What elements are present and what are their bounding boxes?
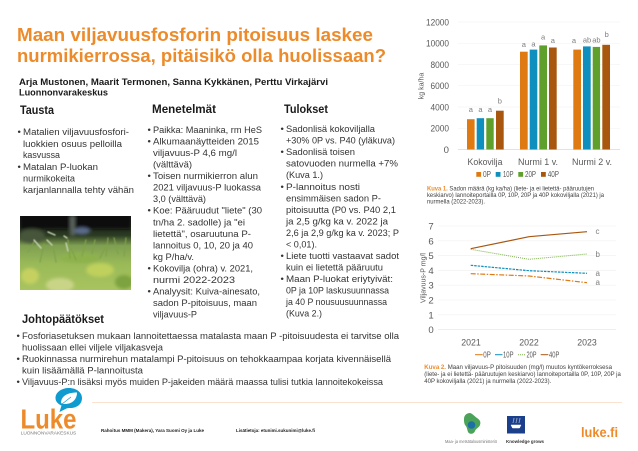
y axis labels: 3 bbox=[428, 281, 434, 292]
x axis labels: 2022 bbox=[519, 337, 539, 348]
y axis labels: 10000 bbox=[426, 39, 449, 50]
panel: Tulokset: (Kuva 1.) bbox=[286, 170, 323, 181]
panel: Tulokset: ja 40 P nousuusuunnassa bbox=[285, 297, 388, 308]
bar chart: sadon määrä bbox=[418, 18, 620, 179]
panel: Menetelmät: Alkumaanäytteiden 2015 bbox=[153, 136, 259, 148]
panel: Menetelmät: kg P/ha/v. bbox=[153, 252, 194, 263]
panel: Tulokset: Maan P-luokat eriytyivät: bbox=[286, 274, 393, 285]
y axis labels: 0 bbox=[428, 325, 434, 336]
significance letters: a bbox=[596, 278, 600, 287]
panel: Menetelmät: • bbox=[148, 206, 151, 216]
y axis labels: 6 bbox=[428, 236, 434, 247]
panel: Menetelmät: tn/ha 2. sadolle) ja "ei bbox=[153, 218, 245, 228]
authors: Luonnonvarakeskus bbox=[19, 86, 108, 98]
panel: Tausta: kasvussa bbox=[23, 150, 61, 161]
logo: Yara: Knowledge grows bbox=[506, 439, 544, 444]
legend bbox=[475, 350, 559, 360]
significance letters: a bbox=[572, 36, 577, 45]
line: 20P bbox=[471, 249, 587, 259]
logo: Yara bbox=[506, 416, 544, 444]
logo: Luke: Luke bbox=[20, 404, 76, 434]
legend: 40P bbox=[549, 350, 559, 360]
category labels: Nurmi 2 v. bbox=[572, 157, 612, 168]
panel: Menetelmät: Paikka: Maaninka, rm HeS bbox=[153, 125, 262, 136]
panel: Menetelmät: 2021 viljavuus-P luokassa bbox=[153, 182, 262, 194]
panel: Menetelmät: nurmi 2022-2023 bbox=[153, 275, 235, 286]
panel: Johtopäätökset: • bbox=[16, 377, 20, 388]
significance letters: a bbox=[551, 36, 556, 45]
panel: Tulokset bbox=[280, 104, 399, 320]
bars: 20P bbox=[486, 45, 600, 150]
panel: Menetelmät: Toisen nurmikierron alun bbox=[153, 171, 258, 182]
line: 0P bbox=[471, 274, 587, 283]
panel: Menetelmät: • bbox=[148, 171, 151, 182]
bars: 10P bbox=[477, 46, 591, 150]
authors bbox=[19, 76, 328, 98]
panel: Tausta: nurmikokeita bbox=[23, 174, 76, 184]
panel: Menetelmät: Kokovilja (ohra) v. 2021, bbox=[153, 264, 253, 274]
logo: ministry: Maa- ja metsätalousministeriö bbox=[445, 439, 498, 444]
significance letters: b bbox=[498, 96, 502, 106]
category labels: Nurmi 1 v. bbox=[518, 157, 558, 168]
panel: Tulokset: • bbox=[280, 274, 284, 285]
y axis labels: 4 bbox=[428, 266, 434, 277]
panel: Menetelmät: • bbox=[148, 136, 151, 148]
line chart: viljavuus-P bbox=[420, 222, 616, 360]
panel: Menetelmät: (välttävä) bbox=[153, 160, 192, 170]
caption: Kuva 1: keskiarvo) lannoiteportailla 0P, 10P, 20P ja 40P kokoviljalla (2021) ja bbox=[427, 192, 605, 199]
category labels: Kokovilja bbox=[468, 157, 503, 168]
panel: Tulokset: 2,6 ja 2,9 g/kg ka v. 2023; P bbox=[286, 228, 399, 239]
y axis title: Viljavuus-P mg/l bbox=[420, 253, 428, 303]
panel: Tausta: • bbox=[18, 162, 21, 173]
panel: Johtopäätökset: • bbox=[16, 331, 20, 342]
panel: Menetelmät: • bbox=[148, 264, 151, 274]
line: 10P bbox=[471, 265, 587, 273]
panel: Tulokset: ja 2,5 g/kg ka v. 2022 ja bbox=[285, 216, 389, 228]
contact note: Lisätietoja: etunimi.sukunimi@luke.fi bbox=[236, 428, 315, 434]
panel: Menetelmät: viljavuus-P bbox=[153, 310, 197, 320]
panel: Tulokset: satovuoden nurmella +7% bbox=[286, 158, 398, 170]
panel: Tulokset: kuin ei lietettä pääruutu bbox=[286, 262, 383, 274]
panel: Johtopäätökset: Viljavuus-P:n lisäksi myös muiden P-jakeiden määrä maassa tulisi tutkia lannoitekokeissa bbox=[22, 377, 384, 388]
title: nurmikierrossa, pitäisikö olla huolissaan? bbox=[17, 45, 386, 66]
significance letters: ab bbox=[592, 36, 601, 44]
heading: Tausta: Tausta bbox=[20, 105, 55, 117]
panel: Johtopäätökset: • bbox=[16, 354, 20, 365]
icon: leaf bbox=[56, 388, 82, 412]
significance letters bbox=[469, 30, 609, 114]
heading: Menetelmät: Menetelmät bbox=[152, 104, 216, 116]
caption: Kuva 1: Kuva 1. Sadon määrä (kg ka/ha) (liete- ja ei lietettä- pääruutujen bbox=[427, 186, 594, 192]
line: 40P bbox=[471, 232, 587, 249]
y axis labels: 6000 bbox=[430, 81, 449, 92]
funding note: Rahoitus MMM (Makera), Yara Suomi Oy ja Luke bbox=[101, 428, 204, 434]
significance letters: c bbox=[596, 227, 600, 236]
panel: Tulokset: +30% 0P vs. P40 (yläkuva) bbox=[286, 136, 395, 146]
bars: 0P bbox=[467, 50, 581, 150]
legend: 0P bbox=[483, 350, 491, 360]
legend: 10P bbox=[503, 350, 514, 360]
caption: Kuva 2 bbox=[424, 364, 621, 385]
legend: 20P bbox=[525, 170, 536, 179]
significance letters: ab bbox=[583, 36, 591, 44]
panel: Menetelmät: lietettä", osaruutuna P- bbox=[153, 229, 251, 240]
significance letters bbox=[596, 227, 600, 287]
panel: Tausta: Matalan P-luokan bbox=[23, 162, 98, 173]
y axis labels: 5 bbox=[428, 251, 434, 262]
panel: Tulokset: (Kuva 2.) bbox=[286, 308, 322, 320]
panel: Menetelmät: lannoitus 0, 10, 20 ja 40 bbox=[153, 240, 253, 252]
panel: Tulokset: • bbox=[280, 251, 284, 262]
panel: Tausta: • bbox=[18, 127, 21, 138]
caption: Kuva 1 bbox=[427, 186, 605, 206]
caption: Kuva 2: (liete- ja ei lietettä- pääruutujen keskiarvo) lannoiteportailla 0P, 10P, 20P ja bbox=[424, 371, 621, 378]
y axis labels: 8000 bbox=[430, 60, 449, 71]
significance letters: a bbox=[531, 40, 536, 48]
panel: Tausta: luokkien osuus pelloilla bbox=[23, 139, 123, 150]
significance letters: a bbox=[478, 105, 483, 114]
panel: Tulokset: Liete tuotti vastaavat sadot bbox=[286, 251, 399, 262]
panel: Tulokset: • bbox=[280, 182, 284, 193]
panel: Menetelmät: • bbox=[148, 286, 151, 298]
legend: 10P bbox=[503, 170, 514, 179]
logo: Luke bbox=[20, 388, 82, 436]
caption: Kuva 2: 40P kokoviljalla (2021) ja nurmella (2022-2023). bbox=[424, 378, 552, 385]
title: Maan viljavuusfosforin pitoisuus laskee bbox=[17, 24, 373, 45]
y axis labels bbox=[426, 18, 449, 156]
panel: Johtopäätökset: kuin lisäämällä P-lannoitusta bbox=[22, 366, 144, 376]
panel: Johtopäätökset: huolissaan ellei viljele viljakasveja bbox=[22, 342, 164, 354]
panel: Johtopäätökset bbox=[16, 314, 400, 388]
title bbox=[17, 24, 386, 66]
logo: ministry bbox=[445, 413, 498, 444]
authors: Arja Mustonen, Maarit Termonen, Sanna Kykkänen, Perttu Virkajärvi bbox=[19, 76, 328, 87]
panel: Johtopäätökset: Fosforiasetuksen mukaan lannoitettaessa matalasta maan P -pitoisuudesta ei tarvitse olla bbox=[22, 331, 400, 342]
panel: Tulokset: ensimmäisen sadon P- bbox=[286, 194, 381, 204]
heading: Johtopäätökset: Johtopäätökset bbox=[22, 314, 104, 326]
y axis labels bbox=[428, 222, 434, 336]
panel: Menetelmät bbox=[148, 104, 262, 320]
bars: 40P bbox=[496, 45, 610, 149]
panel: Menetelmät: 3,0 (välttävä) bbox=[153, 194, 206, 205]
significance letters: b bbox=[596, 250, 600, 259]
photo: grass bbox=[19, 214, 133, 292]
legend: 40P bbox=[548, 170, 559, 179]
panel: Tulokset: • bbox=[280, 124, 284, 135]
category labels bbox=[468, 157, 612, 168]
panel: Johtopäätökset: Ruokinnassa nurmirehun matalampi P-pitoisuus on tehokkaampaa korjata kivennäisellä bbox=[22, 354, 392, 365]
panel: Menetelmät: viljavuus-P 4,6 mg/l bbox=[153, 148, 237, 159]
heading: Tulokset: Tulokset bbox=[284, 104, 328, 116]
panel: Tausta bbox=[18, 105, 134, 196]
x axis labels bbox=[461, 337, 597, 348]
significance letters: b bbox=[605, 30, 609, 39]
y axis labels: 2000 bbox=[430, 124, 449, 135]
panel: Tausta: Matalien viljavuusfosfori- bbox=[23, 127, 129, 138]
x axis labels: 2021 bbox=[461, 337, 481, 348]
x axis labels: 2023 bbox=[577, 337, 597, 348]
significance letters: a bbox=[541, 32, 546, 42]
legend bbox=[476, 170, 559, 179]
panel: Tulokset: P-lannoitus nosti bbox=[286, 182, 360, 193]
logo: Luke: LUONNONVARAKESKUS bbox=[21, 430, 76, 436]
y axis labels: 1 bbox=[428, 310, 434, 321]
panel: Tulokset: Sadonlisä kokoviljalla bbox=[286, 124, 376, 135]
panel: Menetelmät: Koe: Pääruudut "liete" (30 bbox=[153, 206, 262, 216]
panel: Menetelmät: sadon P-pitoisuus, maan bbox=[153, 298, 257, 309]
panel: Tulokset: • bbox=[280, 147, 284, 158]
y axis labels: 0 bbox=[444, 145, 449, 156]
y axis labels: 2 bbox=[428, 296, 434, 306]
panel: Tulokset: < 0,01). bbox=[286, 240, 317, 250]
caption: Kuva 2: Kuva 2. Maan viljavuus-P pitoisuuden (mg/l) muutos kyntökerroksesa bbox=[424, 364, 613, 371]
legend: 0P bbox=[483, 170, 491, 179]
panel: Tulokset: Sadonlisä toisen bbox=[286, 147, 355, 158]
legend: 20P bbox=[526, 350, 536, 360]
significance letters: a bbox=[596, 269, 600, 278]
panel: Tulokset: 0P ja 10P laskusuunnassa bbox=[286, 286, 390, 296]
y axis labels: 12000 bbox=[426, 18, 449, 28]
panel: Menetelmät: • bbox=[148, 125, 151, 136]
significance letters: a bbox=[522, 40, 527, 49]
y axis labels: 4000 bbox=[430, 102, 449, 114]
y axis title: kg ka/ha bbox=[418, 73, 425, 99]
panel: Menetelmät: Analyysit: Kuiva-ainesato, bbox=[153, 286, 260, 298]
website: luke.fi bbox=[581, 425, 618, 440]
caption: Kuva 1: nurmella (2022-2023). bbox=[427, 198, 485, 206]
panel: Tulokset: pitoisuutta (P0 vs. P40 2,1 bbox=[286, 205, 396, 216]
y axis labels: 7 bbox=[428, 222, 434, 232]
significance letters: a bbox=[469, 105, 474, 114]
significance letters: a bbox=[488, 105, 493, 114]
panel: Tausta: karjanlannalla tehty vähän bbox=[23, 185, 134, 196]
